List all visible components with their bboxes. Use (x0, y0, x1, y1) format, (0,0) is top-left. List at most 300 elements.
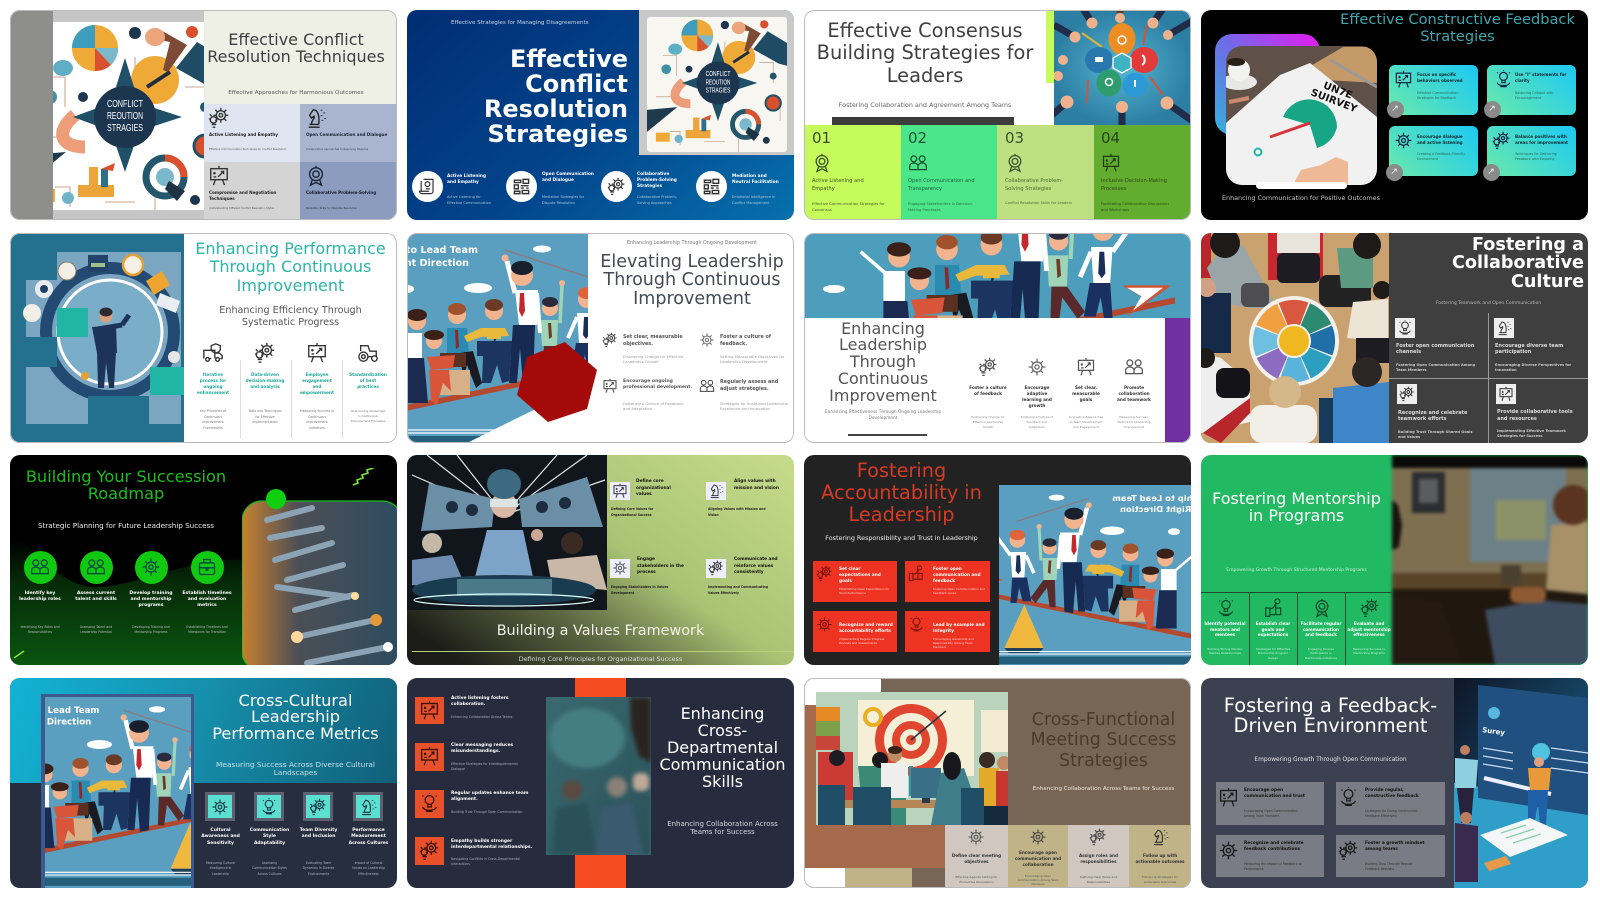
item: empathy: Empathy builds stronger (451, 839, 512, 844)
item: employee engagement: and (313, 384, 321, 389)
icon: presentation (1102, 154, 1120, 172)
item: assess talent: Leadership Potential (80, 630, 112, 634)
icon: gear figure (308, 166, 324, 186)
item: employee engagement: engagement (302, 378, 332, 383)
card: Balance positives: Balance positives with (1515, 134, 1567, 139)
image: hands around consensus flower (1054, 10, 1191, 125)
card: Encourage dialogue: Encourage dialogue (1417, 134, 1463, 139)
column: open communication: Communication Among Team (1017, 878, 1059, 882)
column: clear objectives: objectives (964, 859, 989, 864)
item: define core values: Organizational Success (611, 513, 652, 517)
column: follow up: Follow-Up Strategies for (1142, 875, 1178, 879)
item: align values: Aligning Values with Mission and (708, 507, 766, 511)
green dot (266, 489, 286, 509)
item: define core values: values (636, 492, 652, 497)
item: team diversity: Environments (308, 872, 329, 876)
heading: Cross-Cultural (239, 691, 352, 710)
item: diverse participation: participation (1495, 349, 1531, 355)
image: isometric survey screen (1454, 678, 1588, 888)
item: adaptive learning: Adaptation (1029, 425, 1045, 429)
heading: Improvement (237, 276, 344, 295)
card: open communication: Feedback Loops (933, 591, 956, 595)
item: reinforce values (706, 556, 794, 598)
item: regular communication: and feedback (1305, 632, 1337, 637)
item: clear goals: Design (1268, 656, 1278, 660)
column 03 (997, 125, 1094, 220)
item: collaborative tools: and resources (1497, 416, 1537, 422)
card: Balance positives: Techniques for Delivering (1515, 152, 1557, 156)
subtitle: Enhancing Collaboration Across Teams for Success (1033, 786, 1174, 792)
column 02: 02 (908, 129, 927, 147)
icon: board (1496, 384, 1516, 404)
item: communication style: Adaptability (254, 841, 285, 846)
heading: Cross-Functional (1032, 710, 1175, 730)
item: clear goals: Mentorship Program (1258, 651, 1288, 655)
column 04: Inclusive Decision-Making (1101, 178, 1167, 184)
item: communication style: Communication (250, 828, 289, 833)
panel: Elevating Leadership Through Continuous Improvement (407, 233, 794, 443)
item: key roles (12, 550, 68, 638)
item: define core values: Define core (636, 479, 664, 484)
item: communication style: Across Cultures (258, 872, 281, 876)
item: employee engagement (300, 342, 334, 430)
item: diverse participation: Innovation (1495, 368, 1517, 372)
item: define core values: organizational (636, 486, 671, 490)
item: reinforce values: Implementing and Communicating (708, 585, 768, 589)
icon: gear bulb (816, 565, 833, 582)
card: lead by example: Members (933, 645, 946, 649)
heading: Improvement (633, 289, 751, 309)
image: conflict resolution compass (639, 10, 794, 155)
subtitle: Effective Approaches for Harmonious Outcomes (228, 90, 364, 96)
item: cultural awareness: Intelligence in (210, 866, 231, 870)
item: adaptive learning: adaptive (1027, 391, 1047, 396)
item: collaborative tools: Provide collaborative tools (1497, 409, 1573, 415)
icon: thumb (1264, 598, 1284, 618)
item: Collaborative Problem-Solving (601, 171, 677, 204)
item: Open Communication: and Dialogue (542, 178, 574, 183)
column 04: Facilitating Collaborative Discussions (1101, 202, 1169, 206)
column 01: Empathy (812, 186, 835, 192)
item: iterative process: Continuous (204, 415, 222, 419)
item: Mediation and Neutral Facilitation: Conflict Management (732, 200, 769, 204)
item: collaboration: Improvement (1124, 425, 1144, 429)
item: regular communication: Participants in (1310, 651, 1332, 655)
arrow button (1386, 164, 1402, 180)
column 04: 04 (1101, 129, 1120, 147)
card: expectations: expectations and (839, 573, 881, 578)
subtitle: Enhancing Collaboration Across (667, 820, 778, 828)
icon: chess knight (308, 109, 326, 128)
item: communication style (245, 792, 294, 880)
column: roles: Defining Clear Roles and (1080, 875, 1117, 879)
panel: Enhancing Performance Through Continuous Improvement (10, 233, 397, 443)
icon: chess (1494, 318, 1514, 338)
item: assess strategies: Strategies for Sustained Leadership (720, 400, 788, 406)
item: Active Listening: and Empathy (447, 180, 479, 185)
item: training: and mentorship (131, 597, 171, 602)
item: evaluate effectiveness: Measuring Success in (1353, 647, 1385, 651)
item: collaboration: Promote (1124, 385, 1144, 390)
item: key roles: leadership roles (19, 597, 61, 602)
column 02: Engaging Stakeholders in Decision- (908, 202, 973, 206)
heading: Enhancing (681, 704, 764, 722)
item: Collaborative Problem-Solving: Solving Approaches (637, 200, 672, 204)
icon: board (610, 482, 630, 500)
heading: Enhancing (841, 319, 925, 338)
item: assess strategies: Excellence and Innovation (720, 406, 770, 410)
column: clear objectives: Define clear meeting (952, 853, 1001, 858)
icon: gear bulb (1089, 828, 1107, 846)
card: Focus on specific behaviors: Effective Communication (1417, 90, 1458, 94)
icon: gear bulb (608, 178, 624, 195)
image: team cartoon banner (804, 233, 1191, 318)
icon: award (1008, 154, 1022, 172)
subtitle: Fostering Teamwork and Open Communication (1436, 301, 1541, 306)
item: evaluate effectiveness (1346, 598, 1392, 664)
heading: Effective Consensus (827, 19, 1023, 42)
item: Compromise and Negotiation Techniques: Techniques (209, 196, 235, 201)
card: Use I statements (1487, 65, 1576, 115)
item: communication style: Assessing (262, 860, 277, 864)
image: mentor conversation by window (1392, 455, 1588, 665)
column: roles: responsibilities (1080, 859, 1117, 864)
icon: bulb (1338, 787, 1359, 808)
icon: pattern (514, 178, 530, 194)
item: timelines (179, 550, 235, 638)
card: celebrate contributions: feedback contributions (1244, 847, 1300, 852)
item: active listening: collaboration. (451, 702, 485, 707)
arrow button (1482, 164, 1500, 180)
column 01: 01 (812, 129, 831, 147)
heading (651, 704, 794, 790)
card: growth mindset: Foster a growth mindset (1365, 841, 1425, 846)
subtitle: Teams for Success (690, 828, 755, 836)
arrow button (1484, 100, 1500, 118)
icon: gear (1027, 357, 1047, 377)
item: professional development: Encourage ongoing (623, 379, 673, 384)
icon: team (1124, 357, 1144, 377)
item: identify mentors: Mentee Relationships (1209, 651, 1241, 655)
item: cultural awareness: Sensitivity (207, 841, 234, 846)
heading: Effective (510, 44, 628, 72)
heading: in Programs (1249, 506, 1344, 524)
item: clear goals: goals and (1262, 626, 1284, 632)
icon: gears (1218, 840, 1239, 861)
item: communication style: Communication Styles (252, 866, 287, 870)
item: training: Mentorship Programs (135, 630, 167, 634)
item: performance measurement: Impact of Cultural (355, 860, 382, 864)
item: empathy (415, 837, 543, 870)
column: open communication: Members (1032, 882, 1044, 886)
heading: Improvement (829, 386, 937, 405)
item: clear messaging: Effective Strategies for Interdepartmental (451, 762, 518, 766)
icon: thumb (908, 565, 925, 582)
item: engage stakeholders: Engaging Stakeholders in Values (611, 585, 668, 589)
item: clear goals: Strategies for Effective (1256, 647, 1290, 651)
item: timelines: Milestones for Transition (188, 630, 226, 634)
card: celebrate contributions: Measuring the Impact of Feedback on (1244, 862, 1302, 866)
item: reinforce values: reinforce values (734, 564, 773, 568)
color blocks (804, 678, 881, 705)
icon: gear bulb (1492, 132, 1510, 149)
card: expectations: Team Performance (839, 591, 866, 595)
column: follow up: Follow up with (1143, 853, 1177, 858)
item: recognize teamwork: Building Trust Through Shared Goals (1398, 430, 1472, 434)
card: Encourage dialogue: Creating a Feedback-Friendly (1417, 152, 1465, 156)
icon: gear (699, 332, 715, 348)
item: Open Communication (506, 171, 594, 204)
orange band (575, 678, 626, 888)
heading: Strategies (1059, 751, 1148, 771)
card: Encourage dialogue (1389, 126, 1478, 176)
item: performance measurement: Across Cultures (349, 841, 388, 846)
item: Mediation and Neutral Facilitation: Mediation and (732, 174, 767, 179)
card: expectations: Set clear (839, 567, 861, 572)
icon: team (86, 557, 106, 577)
item: adaptive learning: Feedback and (1027, 420, 1047, 424)
item: align values: Align values with (734, 479, 776, 484)
item: active listening: Enhancing Collaboration Across Teams (451, 715, 512, 719)
heading: Through (850, 352, 916, 371)
item: measurable objectives: Set clear, measurable (623, 334, 683, 340)
card: recognize (813, 611, 897, 652)
item: standardization: Improvement Processes (351, 419, 385, 423)
item: regular communication: Engaging Diverse (1308, 647, 1334, 651)
card: lead by example: Responsibility Among Team (933, 641, 973, 645)
column: clear objectives: Effective Agenda Setting for (955, 875, 998, 879)
item: Compromise and Negotiation Techniques (204, 162, 300, 220)
item: Mediation and Neutral Facilitation: Neutral Facilitation (732, 180, 779, 185)
item: reinforce values: Values Effectively (708, 591, 739, 595)
item: standardization: of best (360, 378, 376, 383)
item: identify mentors: Identify potential (1204, 621, 1246, 626)
heading: Strategies (1420, 28, 1495, 45)
item: training (123, 550, 179, 638)
icon: chess (353, 792, 383, 821)
column: follow up: actionable outcomes (1135, 859, 1185, 864)
gradient band (10, 678, 397, 783)
item: align values (706, 478, 794, 520)
item: regular communication (1298, 598, 1344, 664)
card: Balance positives: Feedback with Empathy (1515, 156, 1555, 160)
item: standardization: Overcoming Challenges (351, 409, 385, 413)
card: Focus on specific behaviors: Strategies for Feedback (1417, 96, 1456, 100)
item: align values: mission and vision (734, 486, 779, 490)
image: team meeting with target (816, 692, 1008, 825)
item: professional development: professional development. (623, 385, 692, 390)
icon: team (30, 557, 50, 577)
column 04 (1094, 125, 1191, 220)
heading: Through Continuous (604, 270, 780, 290)
heading: Roadmap (88, 484, 164, 503)
column 01: Consensus (812, 208, 832, 212)
green curve backdrop (10, 455, 242, 665)
heading: Conflict (525, 70, 628, 98)
item: cultural awareness: Leadership (212, 872, 229, 876)
subtitle: Empowering Growth Through Structured Mentorship Programs (1226, 568, 1367, 573)
item: adaptive learning: learning and (1022, 397, 1052, 402)
item: Active Listening: Active Listening for (447, 194, 481, 198)
subtitle (804, 410, 962, 422)
item: standardization: practices (357, 384, 379, 389)
item: data-driven (246, 342, 284, 424)
item: iterative process: Frameworks (203, 426, 223, 430)
item: Open Communication: Open Communication (542, 172, 594, 177)
item: measurable goals (1062, 357, 1110, 431)
card: open communication: Foster open (933, 567, 962, 572)
item: regular updates: alignment. (451, 797, 478, 802)
item: Active Listening: Effective Communication (447, 200, 491, 204)
card: Focus on specific behaviors: Focus on specific (1417, 72, 1456, 77)
item: assess talent: Assess current (77, 591, 115, 596)
item: assess strategies: adjust strategies. (720, 386, 769, 392)
card: regular constructive feedback: constructive feedback (1365, 794, 1419, 799)
item: open communication channels: Team Members (1396, 368, 1427, 372)
item: clear messaging (415, 743, 543, 772)
icon: tractor (358, 345, 378, 362)
arrow button: ↗ (1390, 166, 1398, 176)
item: timelines: metrics (197, 603, 217, 608)
icon: scroll (419, 178, 434, 194)
heading: Effective Conflict (228, 30, 364, 48)
item: data-driven: for Effective (255, 415, 275, 419)
card: celebrate contributions: Performance (1244, 867, 1264, 871)
subtitle: Measuring Success Across Diverse Cultural (216, 760, 375, 769)
arrow button: ↗ (1391, 104, 1399, 114)
subtitle: Defining Core Principles for Organizational Success (519, 655, 682, 663)
column: roles: Responsibilities (1087, 880, 1110, 884)
item: data-driven: decision-making (246, 378, 284, 383)
card: lead by example: Encouraging Ownership and (933, 637, 974, 641)
column 03: Collaborative Problem- (1005, 178, 1063, 184)
item: Active Listening and Empathy (204, 104, 300, 162)
item: regular communication: communication (1303, 626, 1339, 632)
item: collaboration: collaboration (1118, 391, 1150, 396)
item: recognize teamwork: Recognize and celebrate (1398, 410, 1467, 416)
subtitle: Fostering Responsibility and Trust in Leadership (825, 534, 978, 542)
item: measurable goals: and Engagement (1073, 425, 1099, 429)
heading (592, 253, 792, 308)
item: identify mentors: mentors and (1210, 626, 1240, 632)
item: Active Listening: Active Listening (447, 174, 486, 179)
column: roles: Assign roles and (1079, 853, 1118, 858)
card: Use I statements: Use "I" statements for (1515, 72, 1566, 77)
icon: bulb (419, 793, 440, 814)
item: iterative process: ongoing (203, 384, 223, 389)
item: Mediation and Neutral Facilitation (696, 171, 779, 204)
item: empathy: interdepartmental relationships. (451, 845, 532, 850)
item: clear goals: expectations (1258, 632, 1288, 637)
item: cultural awareness (196, 792, 245, 880)
heading (1204, 696, 1457, 736)
item: clear goals: Establish clear (1256, 621, 1290, 626)
icon: gear (1029, 828, 1047, 846)
panel: Cross-Functional Meeting Success Strategies (804, 678, 1191, 888)
subtitle: Effective Strategies for Managing Disagreements (451, 20, 589, 26)
icon: graduation (419, 700, 440, 721)
column: clear objectives (945, 825, 1008, 888)
panel: Effective Conflict Resolution Strategies (407, 10, 794, 220)
card: expectations (813, 561, 897, 602)
image: mirrored team cartoon (999, 485, 1191, 665)
item: standardization: in Continuous (358, 414, 378, 418)
item: culture of feedback (699, 332, 794, 368)
card: Balance positives: areas for improvement (1515, 140, 1568, 145)
column 03: Conflict Resolution Skills for Leaders (1005, 201, 1072, 205)
item: clear messaging: Clear messaging reduces (451, 743, 513, 748)
item: data-driven: Implementation (252, 420, 278, 424)
item: recognize teamwork (1397, 384, 1487, 442)
item: culture of feedback: Growth (983, 425, 993, 429)
icon: bulb (1395, 318, 1415, 338)
item: assess strategies: Regularly assess and (720, 379, 778, 385)
panel: Enhancing Leadership Through Continuous Improvement (804, 233, 1191, 443)
column 01: Effective Communication Strategies for (812, 202, 885, 206)
icon: bulb (1496, 70, 1510, 88)
item: identify mentors: Building Strong Mentor- (1207, 647, 1243, 651)
item: regular communication: Facilitate regular (1301, 621, 1341, 626)
column 01: Active Listening and (812, 178, 864, 184)
item: Active Listening and Empathy: Effective Communication Techniques for Conflict Resolution (209, 148, 286, 151)
heading: Building Strategies for (817, 41, 1033, 64)
panel: Effective Constructive Feedback Strategies (1201, 10, 1588, 220)
card: Use I statements: clarity (1515, 78, 1530, 83)
lime accent (1046, 10, 1054, 83)
panel: Fostering a Feedback-Driven Environment (1201, 678, 1588, 888)
item: active listening (415, 696, 543, 725)
item: clear goals (1250, 598, 1296, 664)
card: open communication: feedback (933, 579, 955, 584)
icon: chess (706, 482, 726, 500)
column 02 (901, 125, 997, 220)
item: Open Communication: Mediation Strategies for (542, 194, 584, 198)
item: professional development: and Adaptation (623, 406, 652, 410)
item: measurable goals: to Team Development (1069, 420, 1103, 424)
column: open communication: collaboration (1022, 862, 1054, 867)
icon: gear (816, 616, 833, 633)
squiggle (352, 468, 384, 486)
card: lead by example: Lead by example and (933, 623, 985, 628)
heading: Resolution Techniques (207, 46, 385, 66)
card: open communication and trust (1216, 782, 1324, 825)
heading: Skills (702, 772, 743, 790)
panel: Fostering a Collaborative Culture (1201, 233, 1588, 443)
item: performance measurement: Effectiveness (358, 872, 379, 876)
item: cultural awareness: Measuring Cultural (206, 860, 235, 864)
image: conflict resolution compass (53, 11, 204, 219)
card: regular constructive feedback (1336, 782, 1445, 825)
item: align values: Vision (708, 513, 719, 517)
heading (194, 693, 397, 743)
heading: Cross- (698, 720, 747, 740)
item: team diversity: Evaluating Team (306, 860, 331, 864)
item: Collaborative Problem-Solving: Collaborative Problem- (637, 194, 677, 198)
item: diverse participation: Encouraging Diverse Perspectives for (1495, 362, 1571, 366)
item: evaluate effectiveness: Mentorship Programs (1353, 651, 1385, 655)
item: adaptive learning: growth (1029, 403, 1045, 408)
item: evaluate effectiveness: adjust mentorship (1347, 626, 1391, 632)
dividers (1488, 313, 1489, 443)
item: collaboration (1110, 357, 1158, 431)
column: clear objectives: Productive Discussions (959, 880, 994, 884)
panel: Building a Values Framework (407, 455, 794, 665)
icon: gear figure (1360, 598, 1380, 618)
icon: presentation (1076, 357, 1096, 377)
item: iterative process: Iterative (203, 372, 223, 377)
item: culture of feedback: Setting Measurable Objectives for (720, 354, 784, 359)
image: isometric survey screen: Surey (1482, 726, 1506, 737)
